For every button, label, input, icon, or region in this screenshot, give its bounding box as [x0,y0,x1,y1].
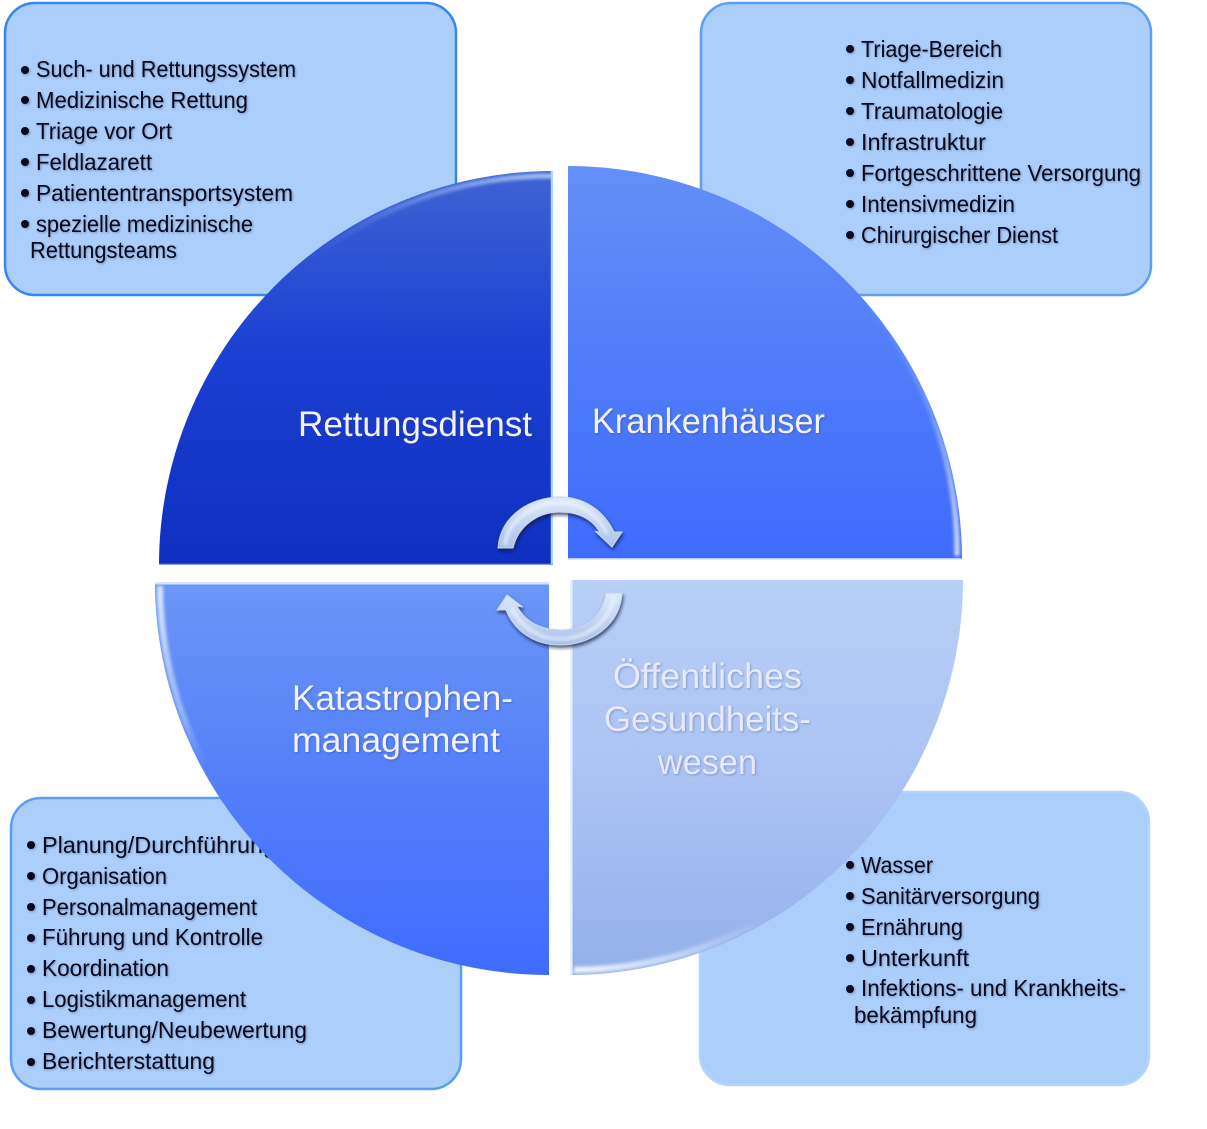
bullet list: Krankenhäuser: Notfallmedizin [861,67,1004,93]
bullet list: Rettungsdienst: spezielle medizinische [36,211,253,237]
bullet list: Katastrophenmanagement: Koordination [42,955,169,981]
bullet list: Krankenhäuser: Fortgeschrittene Versorgung [861,160,1141,186]
bullet list: Krankenhäuser: Infrastruktur [861,129,986,155]
bullet list: Öffentliches Gesundheitswesen: Unterkunft [861,945,970,971]
panel: Krankenhäuser list [701,3,1151,295]
bullet list: Katastrophenmanagement: Berichterstattung [42,1048,215,1074]
panel: Öffentliches Gesundheitswesen list [700,792,1149,1085]
bullet list: Öffentliches Gesundheitswesen: Ernährung [861,914,963,940]
bullet list: Rettungsdienst [21,56,296,263]
bullet list: Rettungsdienst: Rettungsteams [30,237,177,263]
heading: Katastrophenmanagement: management [292,721,500,760]
bullet list: Katastrophenmanagement [27,832,307,1074]
bullet list: Krankenhäuser: Chirurgischer Dienst [861,222,1059,248]
heading: Öffentliches Gesundheitswesen: wesen [657,743,757,782]
bullet list: Katastrophenmanagement: Planung/Durchführung [42,832,276,858]
quadrant: Krankenhäuser [568,166,962,560]
arrow: counter-clockwise bottom [497,593,622,645]
bullet list: Rettungsdienst: Feldlazarett [36,149,153,175]
bullet list: Rettungsdienst: Patiententransportsystem [36,180,293,206]
bullet list: Öffentliches Gesundheitswesen: Infektions- und Krankheits- [861,975,1126,1001]
bullet list: Katastrophenmanagement: Organisation [42,863,167,889]
bullet list: Öffentliches Gesundheitswesen: Sanitärversorgung [861,883,1040,909]
bullet list: Katastrophenmanagement: Bewertung/Neubewertung [42,1017,307,1043]
bullet list: Krankenhäuser [846,36,1141,248]
heading: Öffentliches Gesundheitswesen: Gesundheits- [604,700,811,739]
bullet list: Rettungsdienst: Such- und Rettungssystem [36,56,296,82]
bullet list: Öffentliches Gesundheitswesen [846,852,1126,1028]
bullet list: Krankenhäuser: Triage-Bereich [861,36,1002,62]
bullet list: Öffentliches Gesundheitswesen: Wasser [861,852,933,878]
heading: Katastrophenmanagement: Katastrophen- [292,679,513,718]
bullet list: Katastrophenmanagement: Führung und Kontrolle [42,924,263,950]
heading: Öffentliches Gesundheitswesen [604,657,811,782]
panel: Rettungsdienst list [5,3,456,295]
bullet list: Katastrophenmanagement: Logistikmanagement [42,986,247,1012]
bullet list: Rettungsdienst: Medizinische Rettung [36,87,248,113]
bullet list: Rettungsdienst: Triage vor Ort [36,118,173,144]
bullet list: Krankenhäuser: Intensivmedizin [861,191,1015,217]
heading: Öffentliches Gesundheitswesen: Öffentliches [613,657,802,696]
bullet list: Öffentliches Gesundheitswesen: bekämpfung [854,1002,977,1028]
heading: Katastrophenmanagement [292,679,513,760]
bullet list: Krankenhäuser: Traumatologie [861,98,1003,124]
bullet list: Katastrophenmanagement: Personalmanagement [42,894,258,920]
quadrant: Rettungsdienst [159,171,553,565]
panel: Katastrophenmanagement list [11,798,461,1089]
quadrant: Katastrophenmanagement [155,582,549,975]
quadrant: Öffentliches Gesundheitswesen [570,580,963,975]
heading: Krankenhäuser: Krankenhäuser [592,402,825,441]
heading: Rettungsdienst: Rettungsdienst [298,405,532,444]
arrow: clockwise top [498,497,622,548]
